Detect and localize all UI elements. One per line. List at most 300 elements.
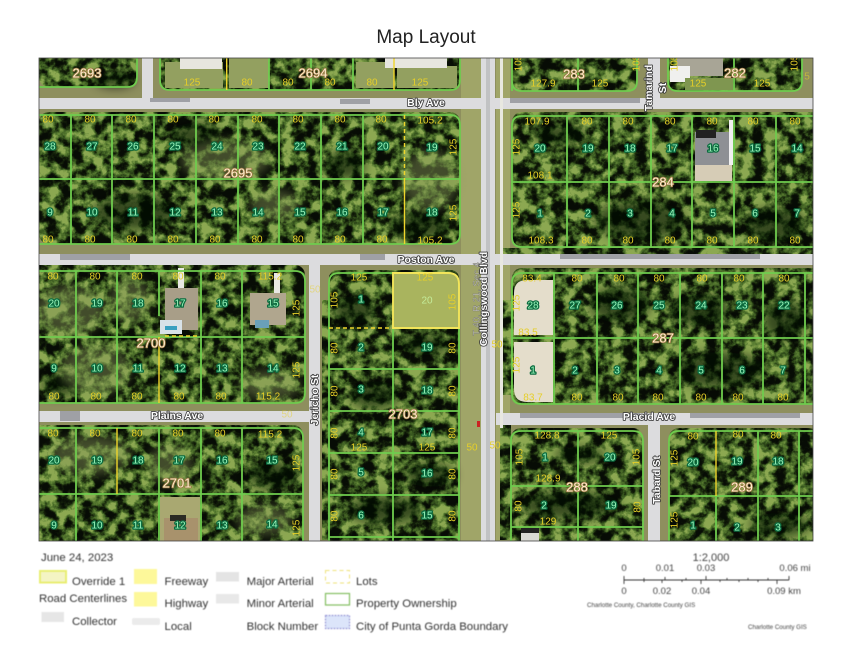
legend: minor arterial	[216, 594, 314, 610]
parcel dimension labels: 80	[131, 428, 143, 440]
block number labels: 2701	[163, 476, 191, 490]
lot number labels: 28	[527, 300, 539, 312]
lot number labels: 15	[749, 144, 761, 154]
house at bottom of block 288	[521, 528, 539, 541]
parcel dimension labels: 80	[215, 392, 227, 402]
parcel dimension labels: 80	[448, 385, 458, 397]
lot number labels: 23	[252, 142, 264, 152]
parcel dimension labels: 80	[622, 116, 634, 128]
parcel dimension labels: 80	[375, 114, 387, 126]
lot number labels: 17	[377, 208, 389, 218]
lot number labels: 20	[48, 298, 60, 310]
parcel dimension labels: 105.2	[417, 116, 443, 126]
lot number labels: 19	[91, 456, 103, 466]
legend: local: Local	[164, 621, 192, 633]
parcel dimension labels: 80	[664, 116, 676, 128]
parcel dimension labels: 80	[334, 234, 346, 246]
scale labels miles	[621, 563, 811, 574]
road name labels	[151, 65, 675, 504]
lot number labels: 20	[48, 456, 60, 466]
parcel dimension labels: 50	[281, 410, 293, 420]
lot number labels: 22	[778, 300, 790, 312]
parcel dimension labels: 80	[330, 510, 340, 522]
parcel dimension labels: 105	[632, 448, 642, 465]
parcel dimension labels: 80	[514, 500, 524, 512]
road name labels: Collingswood Blvd	[478, 252, 490, 346]
parcel dimension labels: 80	[732, 430, 744, 440]
township range section label: T 40, R 21, Sec 4	[472, 262, 482, 336]
scale labels miles: 0.06 mi	[779, 563, 811, 574]
lot number labels: 10	[91, 520, 103, 532]
lot number labels: 16	[707, 144, 719, 154]
parcel dimension labels: 105	[330, 291, 340, 308]
parcel dimension labels: 125	[412, 78, 429, 88]
parcel dimension labels: 105	[514, 54, 524, 71]
parcel dimension labels: 80	[687, 432, 699, 442]
lot number labels: 19	[731, 456, 743, 468]
scale labels kilometres: 0.09 km	[767, 586, 801, 597]
parcel dimension labels: 80	[632, 501, 644, 513]
lot number labels: 18	[132, 298, 144, 310]
parcel dimension labels: 80	[131, 392, 143, 402]
block number labels: 2695	[224, 166, 252, 180]
parcel dimension labels: 80	[131, 272, 143, 282]
parcel dimension labels: 125	[351, 272, 368, 284]
lot number labels: 2	[572, 366, 578, 376]
lot number labels: 1	[358, 294, 364, 306]
parcel dimension labels: 125	[292, 361, 302, 378]
parcel dimension labels: 80	[733, 274, 745, 284]
parcel dimension labels: 50	[489, 440, 501, 452]
lot number labels: 24	[211, 142, 223, 152]
lot number labels: 17	[173, 456, 185, 466]
lot number labels: 16	[216, 456, 228, 466]
lot number labels: 5	[358, 468, 364, 478]
parcel dimension labels: 125	[670, 449, 680, 466]
parcel dimension labels: 50	[309, 284, 321, 296]
house in lot 12 block 2701	[160, 497, 200, 541]
parcel dimension labels: 80	[448, 342, 458, 354]
lot number labels: 18	[772, 456, 784, 468]
parcel dimension labels: 80	[167, 234, 179, 246]
road name labels: Placid Ave	[623, 411, 675, 423]
lot number labels: 26	[611, 300, 623, 312]
parcel dimension labels: 80	[47, 272, 59, 282]
road name labels: St	[657, 82, 669, 93]
parcel dimension labels: 80	[789, 236, 801, 246]
parcel dimension labels: 80	[366, 78, 378, 88]
parcel dimension labels: 80	[47, 428, 59, 440]
lot number labels: 26	[127, 142, 139, 152]
lot number labels: 17	[421, 428, 433, 438]
parcel dimension labels: 80	[706, 116, 718, 128]
lot number labels: 15	[266, 456, 278, 466]
parcel dimension labels: 50	[491, 340, 503, 350]
legend: collector: Collector	[72, 616, 117, 628]
legend: freeway	[134, 569, 208, 588]
map frame	[39, 58, 813, 541]
lot number labels: 7	[794, 208, 800, 220]
parcel dimension labels: 125	[512, 356, 522, 373]
parcel dimension labels: 80	[747, 236, 759, 246]
tree canopy blocks	[30, 50, 822, 555]
parcel dimension labels: 80	[172, 272, 184, 282]
parcel dimension labels: 125	[448, 204, 460, 221]
light canopy patches	[35, 140, 458, 535]
lot number labels: 3	[775, 522, 781, 534]
parcel dimension labels: 80	[241, 78, 253, 88]
parcel dimension labels: 80	[334, 114, 346, 126]
parcel dimension labels: 80	[777, 392, 789, 404]
parcel dimension labels: 105	[670, 54, 680, 71]
scale labels kilometres: 0.04	[692, 586, 710, 597]
houses along the top edge	[180, 58, 447, 69]
parcel dimension labels: 105	[448, 293, 458, 310]
lot number labels: 1	[537, 208, 543, 220]
parcel dimension labels: 80	[571, 274, 583, 284]
road centre shading	[486, 58, 490, 541]
parcel dimension labels: 80	[330, 427, 340, 439]
lot number labels: 24	[695, 300, 707, 312]
legend: override 1	[40, 571, 125, 588]
block number labels	[73, 66, 753, 494]
parcel dimension labels: 80	[376, 234, 388, 246]
lot number labels: 11	[133, 364, 144, 374]
parcel dimension labels: 105.2	[417, 236, 443, 246]
parcel dimension labels: 80	[448, 427, 458, 439]
lot number labels: 19	[582, 144, 594, 154]
block number labels: 2693	[73, 66, 101, 80]
lot number labels: 2	[585, 208, 591, 220]
parcel dimension labels: 80	[789, 116, 801, 128]
parcel dimension labels: 80	[448, 510, 458, 522]
house in lot 15 block 2700	[250, 273, 286, 328]
legend: minor arterial: Minor Arterial	[247, 598, 314, 610]
parcel dimension labels: 80	[613, 274, 625, 284]
lot number labels: 20	[534, 144, 546, 154]
lot number labels: 12	[174, 520, 186, 532]
scale ratio: 1:2,000	[693, 552, 729, 564]
legend: major arterial	[216, 572, 314, 588]
parcel dimension labels: 125	[292, 454, 302, 471]
parcel dimension labels: 83.7	[523, 392, 543, 404]
lot number labels: 6	[358, 510, 364, 522]
parcel dimension labels	[42, 54, 810, 536]
parcel dimension labels: 80	[292, 114, 304, 126]
lot number labels: 9	[51, 520, 57, 532]
legend	[39, 552, 508, 633]
road name labels: Jericho St	[309, 374, 321, 425]
parcel dimension labels: 115.2	[256, 392, 281, 402]
lot number labels: 16	[216, 298, 228, 310]
block number labels: 284	[652, 174, 674, 190]
lot number labels: 18	[132, 456, 144, 466]
house in lot 17 block 2700	[160, 268, 198, 334]
block number labels: 283	[563, 66, 585, 82]
parcel dimension labels: 80	[652, 392, 664, 404]
parcel dimension labels: 80	[770, 430, 782, 442]
lot number labels	[44, 142, 803, 534]
scale labels kilometres: 0.02	[653, 586, 671, 597]
lot number labels: 15	[421, 510, 433, 522]
property ownership lines	[39, 58, 813, 541]
parcel dimension labels: 80	[330, 468, 340, 480]
parcel dimension labels: 125	[292, 299, 302, 316]
parcel dimension labels: 80	[48, 392, 60, 402]
house in block 282	[670, 58, 733, 90]
lot number labels: 23	[736, 300, 748, 312]
scale labels miles: 0.01	[656, 563, 674, 574]
legend date: June 24, 2023	[41, 552, 113, 564]
lot number labels: 10	[91, 364, 103, 374]
parcel dimension labels: 125	[592, 78, 609, 90]
parcel dimension labels: 128.8	[534, 430, 560, 442]
parcel dimension labels: 105	[632, 54, 642, 71]
parcel dimension labels: 80	[653, 274, 665, 284]
selected parcel outline	[393, 273, 459, 328]
block number labels: 2703	[389, 406, 417, 422]
lot number labels: 21	[336, 142, 348, 152]
parcel dimension labels: 128.9	[535, 474, 561, 484]
parcel dimension labels: 125	[670, 511, 680, 528]
legend: freeway: Freeway	[164, 576, 208, 588]
parcel dimension labels: 83.5	[518, 328, 538, 338]
lot number labels: 2	[541, 500, 547, 512]
lot number labels: 5	[710, 208, 716, 220]
lot number labels: 13	[211, 208, 223, 218]
lot number labels: 12	[169, 208, 181, 218]
parcel dimension labels: 50	[466, 442, 478, 454]
legend: property ownership	[326, 594, 457, 610]
lot number labels: 4	[656, 366, 662, 376]
parcel dimension labels: 80	[173, 392, 185, 402]
parcel dimension labels: 80	[622, 236, 634, 246]
road name labels: Bly Ave	[407, 97, 445, 109]
lot number labels: 7	[780, 366, 786, 376]
map panel	[30, 50, 822, 555]
roads	[39, 58, 813, 541]
lot number labels: 3	[358, 384, 364, 396]
lot number labels: 14	[791, 144, 803, 154]
block number labels: 287	[652, 330, 674, 346]
parcel dimension labels: 80	[695, 392, 707, 404]
lot number labels: 19	[91, 298, 103, 310]
lot number labels: 1	[530, 366, 536, 376]
parcel dimension labels: 83.4	[522, 274, 542, 284]
lot number labels: 4	[669, 208, 675, 220]
credit 2: Charlotte County GIS	[748, 624, 807, 631]
parcel dimension labels: 80	[251, 114, 263, 126]
lawns in block 2694	[165, 58, 457, 88]
parcel dimension labels: 125	[419, 442, 436, 454]
block number labels: 288	[566, 480, 588, 494]
parcel dimension labels: 80	[732, 392, 744, 404]
tree shadows on roads	[60, 98, 800, 421]
legend: highway	[134, 592, 208, 610]
cleared parcels 28 and 1	[514, 280, 553, 402]
lot number labels: 16	[336, 208, 348, 218]
legend: lots: Lots	[356, 576, 378, 588]
parcel dimension labels: 129	[540, 516, 557, 528]
parcel dimension labels: 80	[330, 385, 340, 397]
parcel dimension labels: 80	[696, 274, 708, 284]
parcel dimension labels: 80	[209, 234, 221, 246]
lot number labels: 20	[604, 452, 616, 464]
subject parcel 20	[393, 273, 459, 328]
lot number labels: 22	[294, 142, 306, 152]
block number labels: 2694	[299, 66, 327, 80]
lot number labels: 11	[133, 520, 144, 532]
parcel dimension labels: 125	[184, 78, 201, 88]
lot number labels: 19	[421, 342, 433, 354]
parcel dimension labels: 80	[90, 392, 102, 402]
lot number labels: 19	[605, 500, 617, 512]
parcel dimension labels: 80	[448, 468, 458, 480]
lot number labels: 14	[252, 208, 264, 218]
parcel dimension labels: 80	[324, 78, 336, 88]
lot number labels: 15	[267, 298, 279, 310]
lot number labels: 20	[687, 458, 699, 468]
lot number labels: 9	[51, 364, 57, 374]
verge ground	[39, 58, 813, 541]
legend: city boundary	[326, 616, 508, 633]
parcel dimension labels: 107.9	[524, 116, 550, 128]
parcel dimension labels: 80	[42, 114, 54, 126]
legend: collector	[42, 612, 117, 628]
parcel dimension labels: 80	[84, 234, 96, 246]
parcel dimension labels: 80	[214, 272, 226, 282]
parcel dimension labels: 80	[251, 234, 263, 246]
lot number labels: 14	[266, 520, 278, 530]
parcel dimension labels: 80	[581, 116, 593, 128]
road name labels: Tabard St	[651, 456, 663, 504]
legend: lots	[326, 570, 378, 588]
legend: highway: Highway	[164, 598, 208, 610]
parcel dimension labels: 125	[351, 442, 368, 454]
parcel dimension labels: 125	[448, 138, 460, 155]
block number labels: 282	[724, 66, 746, 80]
parcel dimension labels: 80	[282, 78, 294, 88]
lot number labels: 27	[86, 142, 98, 152]
parcel dimension labels: 105	[790, 54, 800, 71]
title: Map Layout	[376, 27, 476, 48]
scale line and ticks	[624, 576, 789, 584]
car on road	[477, 421, 480, 427]
lot number labels: 5	[698, 366, 704, 376]
lot number labels: 17	[174, 298, 186, 310]
lot number labels: 19	[426, 142, 438, 154]
scale bar	[587, 552, 811, 631]
lot number labels: 3	[614, 366, 620, 376]
parcel dimension labels: 80	[172, 428, 184, 440]
lot number labels: 2	[358, 342, 364, 354]
parcel dimension labels: 80	[330, 342, 340, 354]
lot number labels: 6	[739, 366, 745, 376]
parcel dimension labels: 5	[804, 72, 810, 82]
parcel dimension labels: 80	[778, 274, 790, 284]
scale labels miles: 0.03	[697, 563, 715, 574]
credit: Charlotte County, Charlotte County GIS	[587, 602, 695, 609]
legend: property ownership: Property Ownership	[356, 598, 457, 610]
parcel dimension labels: 115.2	[258, 430, 283, 440]
lot number labels: 16	[421, 468, 433, 480]
parcel dimension labels: 80	[42, 234, 54, 246]
house in lot 16 block 284	[695, 120, 733, 181]
parcel dimension labels: 80	[664, 236, 676, 246]
lot number labels: 4	[358, 428, 364, 438]
parcel dimension labels: 80	[208, 114, 220, 126]
parcel dimension labels: 80	[167, 114, 179, 126]
lot number labels: 10	[86, 208, 98, 218]
lot number labels: 12	[174, 364, 186, 374]
legend: city boundary: City of Punta Gorda Boundary	[356, 621, 508, 633]
lot number labels: 18	[624, 144, 636, 154]
parcel dimension labels: 125	[417, 272, 434, 284]
parcel dimension labels: 80	[612, 392, 624, 404]
parcel dimension labels: 80	[706, 236, 718, 246]
parcel dimension labels: 105	[514, 448, 526, 465]
parcel dimension labels: 80	[747, 116, 759, 128]
scale labels miles: 0	[621, 563, 627, 574]
road name labels: Plains Ave	[151, 410, 203, 422]
parcel dimension labels: 125	[512, 201, 522, 218]
lot number labels: 28	[44, 142, 56, 152]
parcel dimension labels: 125	[601, 430, 618, 442]
lot number labels: 3	[627, 208, 633, 220]
lot number labels: 1	[542, 452, 548, 464]
scale labels kilometres	[621, 586, 801, 597]
legend: road centerlines: Road Centerlines	[39, 593, 127, 605]
block number labels: 289	[731, 480, 753, 494]
lot number labels: 11	[128, 208, 139, 218]
lot number labels: 25	[653, 300, 665, 312]
parcel dimension labels: 108.1	[527, 170, 553, 182]
parcel dimension labels: 125	[292, 519, 302, 536]
lot number labels: 27	[569, 300, 581, 312]
lot number labels: 20	[377, 142, 389, 152]
parcel dimension labels: 80	[292, 234, 304, 246]
parcel dimension labels: 125	[690, 78, 707, 90]
legend: block number: Block Number	[247, 621, 318, 633]
lawn strips along Collingswood Blvd	[461, 58, 510, 541]
parcel dimension labels: 125	[754, 78, 771, 90]
parcel dimension labels: 80	[581, 236, 593, 246]
parcel dimension labels: 80	[125, 114, 137, 126]
lot number labels: 18	[421, 386, 433, 396]
dark canopy patches	[42, 72, 810, 537]
road name labels: Poston Ave	[398, 254, 455, 266]
lot number labels: 9	[47, 208, 53, 218]
parcel dimension labels: 125	[512, 294, 522, 311]
lot number labels: 2	[734, 522, 740, 534]
parcel dimension labels: 80	[126, 234, 138, 246]
lot number labels: 1	[690, 520, 696, 532]
lot lines	[117, 58, 716, 496]
legend: local	[132, 618, 192, 633]
scale labels kilometres: 0	[621, 586, 627, 597]
lot number labels: 13	[216, 364, 228, 374]
block number labels: 2700	[137, 336, 165, 350]
subject lot number: 20	[421, 296, 433, 306]
lot number labels: 6	[752, 208, 758, 220]
parcel dimension labels: 115.2	[258, 272, 283, 282]
parcel dimension labels: 80	[89, 428, 101, 440]
road name labels: Tamarind	[643, 65, 655, 111]
lot number labels: 14	[267, 364, 279, 374]
parcel dimension labels: 80	[89, 272, 101, 282]
parcel dimension labels: 80	[214, 428, 226, 440]
parcel dimension labels: 80	[571, 392, 583, 404]
